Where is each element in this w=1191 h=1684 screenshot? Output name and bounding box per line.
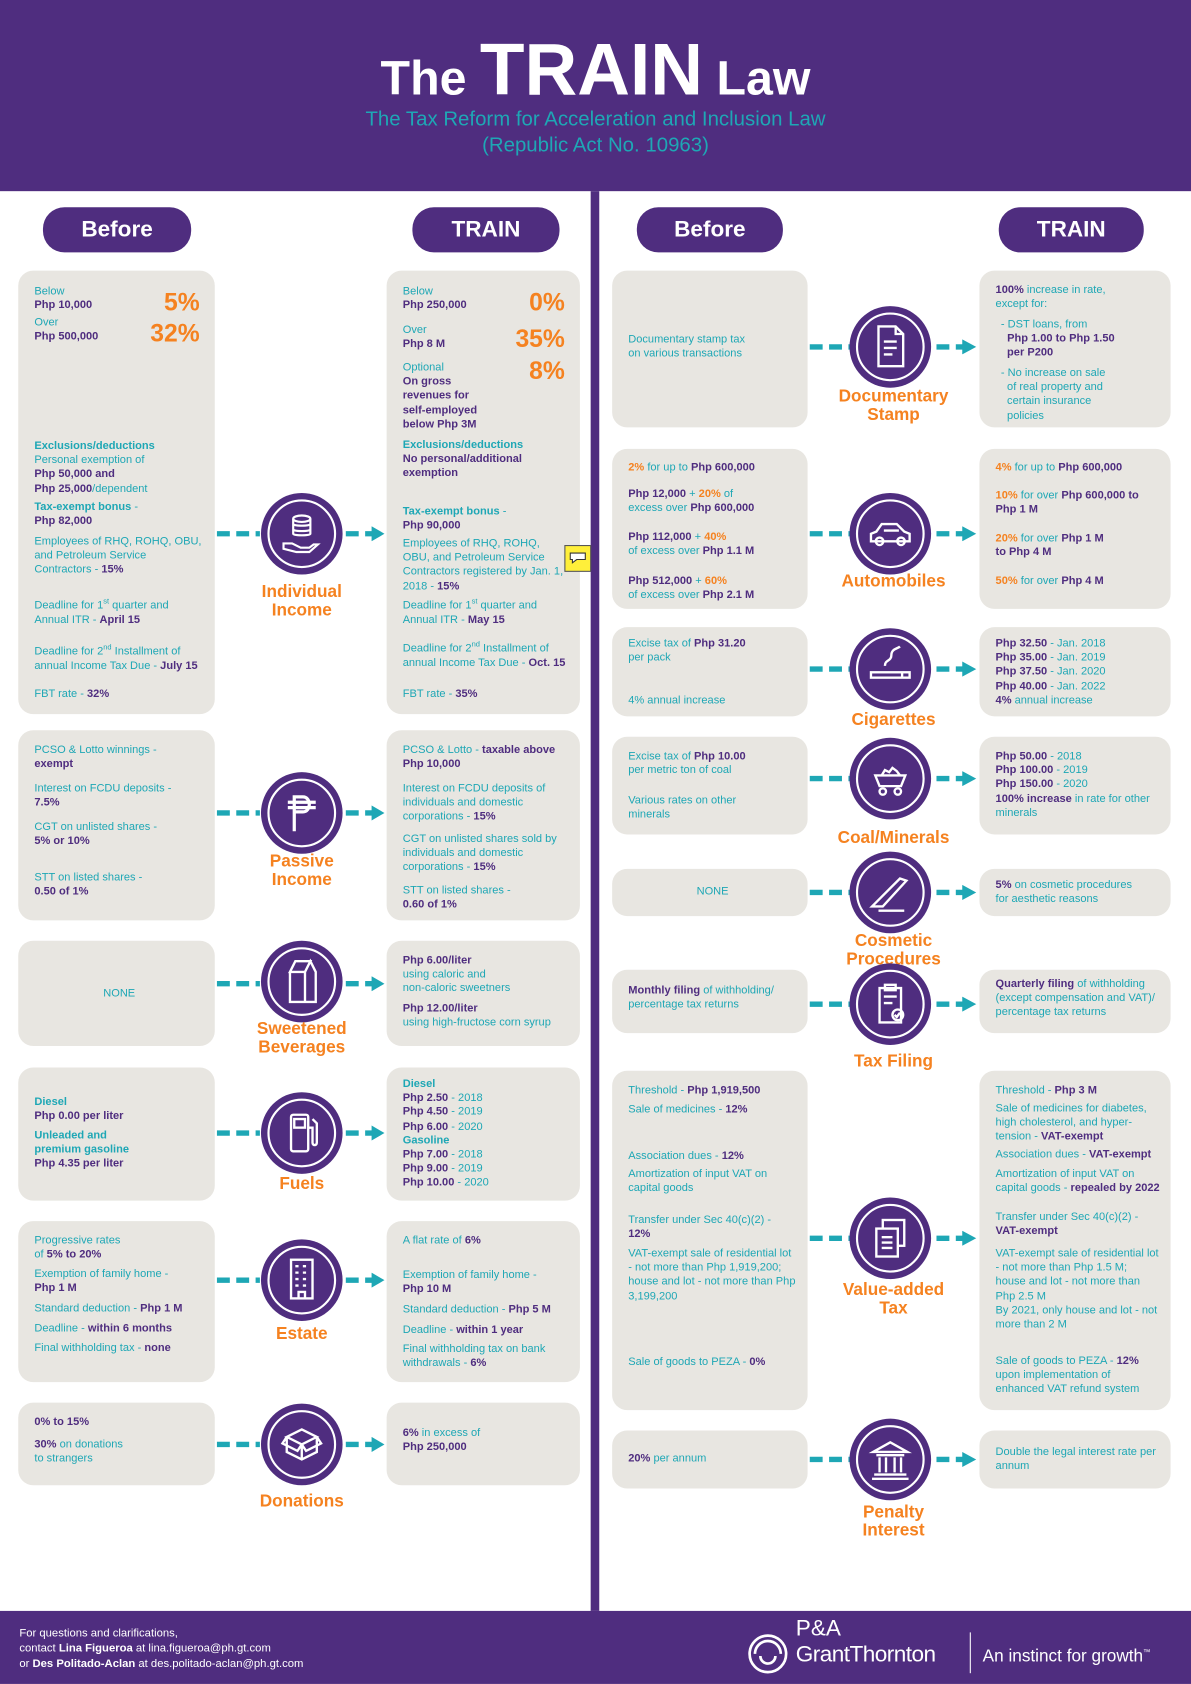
label: value-added tax [843, 1281, 944, 1318]
icon: coal cart [850, 738, 932, 820]
panel: passive before: exempt [34, 758, 73, 770]
subtitle: (Republic Act No. 10963) [482, 134, 709, 157]
panel: individual income before: Php 10,000 [34, 300, 92, 312]
panel: cigarettes train: Php 32.50 - Jan. 2018 [996, 638, 1106, 650]
panel: individual income before: 32% [150, 319, 200, 347]
panel: individual income before: Personal exemption of [34, 454, 144, 466]
arrow: estate [216, 1272, 384, 1288]
icon: courthouse [850, 1418, 932, 1500]
label: coal/minerals: Coal/Minerals [838, 829, 949, 847]
panel: passive train: CGT on unlisted shares sold by individuals and domestic corporations - 15% [403, 833, 557, 874]
panel: passive train: STT on listed shares - [403, 885, 511, 897]
panel: documentary before [612, 271, 808, 427]
panel: coal before: Various rates on other [628, 795, 736, 807]
panel: individual income before: Php 25,000/dependent [34, 483, 148, 495]
panel: individual income train: Deadline for 2nd Installment of annual Income Tax Due - Oct. 15 [403, 641, 565, 669]
icon: gift box [261, 1404, 343, 1486]
label: sweetened beverages [257, 1020, 347, 1057]
pill: before right [637, 207, 783, 252]
panel: fuels train [387, 1067, 580, 1201]
panel: cosmetic train: 5% on cosmetic procedures [996, 880, 1132, 891]
panel: coal train: 100% increase in rate for other minerals [996, 793, 1150, 819]
panel: documentary train [979, 271, 1171, 427]
panel: documentary train: per P200 [1007, 347, 1053, 359]
panel: sweetened before: NONE [103, 988, 135, 1000]
panel: individual income train: FBT rate - 35% [403, 688, 478, 700]
panel: fuels train: Php 4.50 - 2019 [403, 1107, 483, 1118]
panel: estate train: A flat rate of 6% [403, 1235, 481, 1247]
panel: vat train: Transfer under Sec 40(c)(2) - [996, 1211, 1138, 1223]
panel: fuels train: Php 2.50 - 2018 [403, 1092, 483, 1104]
panel: individual income before [18, 271, 215, 714]
arrow: cosmetic [810, 885, 976, 900]
panel: individual income train: Deadline for 1st quarter and Annual ITR - May 15 [403, 598, 537, 626]
panel: individual income before: FBT rate - 32% [34, 688, 109, 700]
panel: individual income train: 0% [529, 288, 565, 316]
pill: before left [43, 207, 191, 252]
panel: individual income before: Php 82,000 [34, 516, 92, 528]
icon: document [850, 306, 932, 388]
panel: penalty train [979, 1430, 1171, 1488]
panel: passive before: PCSO & Lotto winnings - [34, 744, 157, 756]
label: cosmetic procedures: Cosmetic [855, 932, 932, 950]
panel: automobiles train [979, 449, 1171, 609]
icon: individual income [260, 493, 343, 574]
arrow: sweetened [216, 976, 384, 992]
panel: vat train: VAT-exempt [996, 1226, 1058, 1237]
panel: automobiles train: 10% for over Php 600,000 to Php 1 M [996, 490, 1139, 516]
icon: comment note [564, 545, 592, 572]
panel: vat before: VAT-exempt sale of residential lot - not more than Php 1,919,200; house and lot - not more than Php 3,199,200 [628, 1248, 795, 1302]
icon: scalpel [850, 852, 932, 934]
icon: cigarette [850, 628, 932, 710]
panel: coal before: per metric ton of coal [628, 765, 732, 777]
panel: individual income train: Below [403, 286, 433, 297]
icon: car [850, 493, 932, 574]
footer contact text: or Des Politado-Aclan at des.politado-aclan@ph.gt.com [19, 1657, 303, 1670]
panel: cigarettes before: per pack [628, 652, 671, 664]
panel: fuels before: premium gasoline [34, 1144, 129, 1156]
panel: vat train: Sale of medicines for diabetes, high cholesterol, and hyper-tension - VAT-exempt [996, 1103, 1147, 1143]
label: fuels: Fuels [279, 1175, 324, 1193]
panel: documentary train: Php 1.00 to Php 1.50 [1007, 333, 1115, 345]
arrow: tax filing [810, 996, 976, 1012]
panel: fuels before: Diesel [34, 1096, 67, 1108]
label: cigarettes: Cigarettes [852, 711, 936, 729]
panel: cosmetic before [612, 869, 808, 916]
icon: fuel pump [261, 1092, 343, 1174]
panel: tax filing train: Quarterly filing of withholding (except compensation and VAT)/ percentage tax returns [996, 978, 1155, 1019]
icon: peso [261, 772, 343, 854]
label: value-added tax: Value-added [843, 1281, 944, 1299]
panel: coal train: Php 150.00 - 2020 [996, 779, 1088, 791]
panel: fuels before: Unleaded and [34, 1130, 107, 1142]
panel: estate before [18, 1221, 215, 1382]
panel: cigarettes train: Php 37.50 - Jan. 2020 [996, 666, 1106, 678]
icon: carton [260, 940, 343, 1022]
label: individual income [262, 583, 342, 620]
panel: tax filing before [612, 970, 808, 1033]
arrow: passive [216, 806, 384, 820]
panel: individual income train: On gross [403, 376, 451, 388]
panel: sweetened train: using high-fructose corn syrup [403, 1017, 551, 1029]
panel: donations before: to strangers [34, 1453, 93, 1465]
panel: tax filing before: Monthly filing of withholding/ percentage tax returns [628, 985, 774, 1011]
icon: clipboard [850, 963, 932, 1045]
panel: individual income train: No personal/additional exemption [403, 453, 522, 479]
panel: estate before: Php 1 M [34, 1283, 77, 1294]
panel: penalty before: 20% per annum [628, 1453, 706, 1465]
panel: documentary train: policies [1007, 410, 1044, 422]
panel: cosmetic train [979, 869, 1171, 916]
pill: before left: Before [81, 217, 153, 242]
label: documentary stamp: Documentary [839, 388, 948, 406]
panel: passive train: 0.60 of 1% [403, 899, 457, 911]
arrow: documentary [810, 340, 976, 354]
arrow: individual [216, 526, 384, 542]
panel: passive train: PCSO & Lotto - taxable above Php 10,000 [403, 744, 555, 770]
panel: sweetened train [387, 941, 580, 1046]
panel: fuels train: Php 9.00 - 2019 [403, 1163, 483, 1175]
label: sweetened beverages: Sweetened [257, 1020, 347, 1038]
label: donations: Donations [260, 1493, 344, 1511]
panel: donations train: Php 250,000 [403, 1441, 467, 1453]
panel: donations train [387, 1403, 580, 1485]
panel: vat train: VAT-exempt sale of residential lot - not more than Php 1.5 M; [996, 1248, 1159, 1274]
label: documentary stamp: Stamp [867, 406, 920, 424]
label: individual income: Individual [262, 583, 342, 601]
arrow: automobiles [810, 526, 976, 542]
panel: donations train: 6% in excess of [403, 1427, 480, 1439]
panel: documentary train: except for: [996, 299, 1047, 311]
panel: automobiles train: to Php 4 M [996, 547, 1051, 559]
subtitle: The Tax Reform for Acceleration and Inclusion Law [365, 108, 826, 131]
panel: passive before: 7.5% [34, 797, 60, 809]
panel: vat before: Threshold - Php 1,919,500 [628, 1085, 760, 1096]
panel: individual income before: Php 50,000 and [34, 469, 115, 480]
panel: cigarettes train: Php 35.00 - Jan. 2019 [996, 652, 1106, 664]
logo: P&A [796, 1616, 841, 1641]
panel: estate train: Exemption of family home - [403, 1269, 537, 1281]
panel: donations before [18, 1403, 215, 1485]
subtitle [365, 108, 826, 157]
panel: cigarettes before: Excise tax of Php 31.20 [628, 638, 746, 650]
title: The TRAIN Law [381, 29, 810, 111]
panel: cigarettes train: 4% annual increase [996, 695, 1093, 706]
label: passive income [270, 853, 334, 889]
panel: individual income train: Optional [403, 362, 444, 374]
panel: fuels before: Php 4.35 per liter [34, 1158, 123, 1170]
panel: donations before: 0% to 15% [34, 1417, 89, 1428]
label: sweetened beverages: Beverages [258, 1038, 345, 1057]
panel: sweetened train: Php 6.00/liter [403, 955, 472, 967]
panel: sweetened train: non-caloric sweetners [403, 983, 510, 995]
pill: train right: TRAIN [1037, 217, 1106, 242]
panel: coal train [979, 737, 1171, 834]
label: automobiles: Automobiles [841, 572, 946, 591]
footer contact text: For questions and clarifications, [19, 1627, 178, 1640]
arrow: vat [810, 1230, 976, 1246]
panel: vat train: Threshold - Php 3 M [996, 1085, 1097, 1096]
footer contact text [19, 1627, 303, 1670]
panel: passive train [387, 730, 580, 920]
panel: individual income train: Php 250,000 [403, 300, 467, 312]
panel: individual income train: Over [403, 324, 427, 336]
panel: vat train: By 2021, only house and lot - not more than 2 M [996, 1305, 1157, 1331]
arrow: penalty [810, 1452, 976, 1467]
panel: documentary train: - DST loans, from [1001, 319, 1087, 331]
panel: sweetened train: using caloric and [403, 969, 486, 981]
panel: documentary train: - No increase on sale [1001, 367, 1105, 379]
panel: individual income train: below Php 3M [403, 419, 476, 430]
panel: cigarettes before [612, 627, 808, 716]
panel: tax filing train [979, 970, 1171, 1033]
panel: cigarettes before: 4% annual increase [628, 695, 725, 707]
pill: train left: TRAIN [451, 217, 520, 242]
panel: cosmetic before: NONE [697, 886, 729, 898]
panel: individual income train: Php 90,000 [403, 520, 461, 532]
panel: individual income before: Employees of RHQ, ROHQ, OBU, and Petroleum Service Contractors - 15% [34, 536, 202, 576]
logo [748, 1616, 1151, 1674]
panel: fuels train: Gasoline [403, 1135, 449, 1147]
arrow: cigarettes [810, 662, 976, 676]
panel: vat train [979, 1071, 1171, 1410]
label: penalty interest: Penalty [863, 1504, 924, 1522]
panel: vat before: Amortization of input VAT on capital goods [628, 1168, 767, 1194]
header [0, 0, 1191, 191]
pill: before right: Before [674, 217, 746, 242]
panel: automobiles train: 20% for over Php 1 M [996, 533, 1104, 544]
panel: coal before: Excise tax of Php 10.00 [628, 751, 746, 762]
panel: fuels train: Php 10.00 - 2020 [403, 1177, 489, 1189]
panel: passive before: 5% or 10% [34, 836, 90, 848]
label: penalty interest [862, 1504, 925, 1540]
panel: estate before: of 5% to 20% [34, 1249, 101, 1261]
panel: automobiles before [612, 449, 808, 609]
panel: coal train: Php 50.00 - 2018 [996, 751, 1082, 762]
panel: individual income before: Over [34, 317, 58, 329]
panel: cigarettes train [979, 627, 1171, 716]
label: individual income: Income [272, 601, 332, 620]
logo: GrantThornton [796, 1642, 935, 1667]
panel: fuels before [18, 1067, 215, 1201]
panel: vat train: Association dues - VAT-exempt [996, 1149, 1151, 1161]
arrow: coal [810, 771, 976, 786]
panel: individual income before: Deadline for 1st quarter and Annual ITR - April 15 [34, 598, 169, 626]
panel: automobiles train: 4% for up to Php 600,000 [996, 462, 1122, 474]
panel: estate before: Progressive rates [34, 1235, 120, 1247]
panel: individual income train [387, 271, 580, 714]
panel: vat before: Transfer under Sec 40(c)(2) - [628, 1215, 771, 1226]
panel: fuels train: Php 6.00 - 2020 [403, 1121, 483, 1133]
panel: estate before: Exemption of family home - [34, 1268, 168, 1280]
panel: documentary train: 100% increase in rate, [996, 285, 1106, 296]
panel: individual income train: self-employed [403, 404, 477, 416]
panel: individual income before: 5% [164, 288, 200, 316]
panel: documentary before: Documentary stamp tax [628, 334, 745, 346]
panel: automobiles before: excess over Php 600,000 [628, 503, 754, 515]
panel: vat before: 12% [628, 1229, 650, 1241]
panel: documentary before: on various transactions [628, 348, 742, 360]
panel: estate train: Deadline - within 1 year [403, 1324, 523, 1336]
panel: donations before: 30% on donations [34, 1439, 123, 1451]
panel: sweetened train: Php 12.00/liter [403, 1003, 478, 1015]
label: cosmetic procedures: Procedures [846, 950, 941, 969]
panel: coal before: minerals [628, 809, 670, 821]
logo: An instinct for growth™ [983, 1647, 1151, 1666]
arrow: donations [216, 1437, 384, 1452]
panel: documentary train: certain insurance [1007, 396, 1091, 407]
panel: automobiles train: 50% for over Php 4 M [996, 576, 1104, 587]
panel: individual income train: Exclusions/deductions [403, 439, 523, 451]
panel: passive train: Interest on FCDU deposits of individuals and domestic corporations - 15% [403, 783, 545, 823]
panel: individual income before: Php 500,000 [34, 331, 98, 343]
panel: vat train: house and lot - not more than Php 2.5 M [996, 1276, 1140, 1302]
icon: building [260, 1239, 343, 1321]
panel: vat before: Sale of goods to PEZA - 0% [628, 1356, 765, 1368]
panel: individual income train: 35% [515, 324, 565, 352]
panel: passive before: STT on listed shares - [34, 872, 142, 884]
panel: vat before [612, 1071, 808, 1410]
panel: individual income train: Tax-exempt bonus - [403, 506, 506, 518]
arrow: fuels [216, 1126, 384, 1140]
panel: automobiles before: Php 12,000 + 20% of [628, 489, 733, 500]
panel: passive before: 0.50 of 1% [34, 886, 88, 898]
panel: vat before: Association dues - 12% [628, 1150, 744, 1162]
panel: fuels train: Php 7.00 - 2018 [403, 1149, 483, 1161]
panel: penalty before [612, 1430, 808, 1488]
footer contact text: contact Lina Figueroa at lina.figueroa@ph.gt.com [19, 1642, 271, 1655]
panel: individual income before: Tax-exempt bonus - [34, 502, 138, 513]
icon: stacked documents [850, 1198, 932, 1280]
panel: individual income before: Deadline for 2nd Installment of annual Income Tax Due - July 15 [34, 644, 198, 672]
panel: penalty train: Double the legal interest rate per annum [996, 1447, 1156, 1473]
label: estate: Estate [276, 1325, 328, 1343]
panel: fuels before: Php 0.00 per liter [34, 1111, 123, 1122]
label: value-added tax: Tax [879, 1299, 908, 1318]
panel: individual income train: Php 8 M [403, 339, 445, 350]
panel: estate train [387, 1221, 580, 1382]
pill: train left [412, 207, 560, 252]
panel: automobiles before: Php 112,000 + 40% [628, 532, 726, 543]
label: tax filing: Tax Filing [854, 1052, 933, 1071]
panel: estate before: Final withholding tax - none [34, 1342, 171, 1354]
panel: coal before [612, 737, 808, 834]
panel: vat before: Sale of medicines - 12% [628, 1104, 748, 1116]
panel: individual income train: 8% [529, 357, 565, 384]
panel: automobiles before: of excess over Php 1.1 M [628, 546, 754, 558]
panel: passive before: CGT on unlisted shares - [34, 822, 157, 833]
label: passive income: Income [272, 871, 332, 889]
panel: automobiles before: 2% for up to Php 600,000 [628, 462, 755, 474]
panel: coal train: Php 100.00 - 2019 [996, 765, 1088, 777]
panel: automobiles before: of excess over Php 2.1 M [628, 590, 754, 602]
label: passive income: Passive [270, 853, 334, 871]
pill: train right [999, 207, 1144, 252]
panel: documentary train: of real property and [1007, 381, 1103, 393]
label: documentary stamp [839, 388, 948, 424]
panel: estate train: Final withholding tax on bank withdrawals - 6% [403, 1343, 545, 1369]
panel: individual income before: Exclusions/deductions [34, 440, 155, 452]
panel: vat train: Amortization of input VAT on capital goods - repealed by 2022 [996, 1168, 1160, 1194]
panel: passive before: Interest on FCDU deposits - [34, 783, 171, 795]
panel: sweetened before [18, 941, 215, 1046]
panel: estate before: Deadline - within 6 months [34, 1323, 172, 1335]
label: penalty interest: Interest [862, 1522, 925, 1540]
panel: individual income before: Below [34, 286, 64, 297]
panel: cosmetic train: for aesthetic reasons [996, 894, 1098, 906]
panel: fuels train: Diesel [403, 1078, 435, 1090]
panel: estate train: Php 10 M [403, 1284, 451, 1295]
panel: estate before: Standard deduction - Php 1 M [34, 1303, 183, 1315]
panel: individual income train: revenues for [403, 390, 469, 402]
label: cosmetic procedures [846, 932, 941, 969]
panel: individual income train: Employees of RHQ, ROHQ, OBU, and Petroleum Service Contractors registered by Jan. 1, 2018 - 15% [403, 538, 563, 592]
panel: cigarettes train: Php 40.00 - Jan. 2022 [996, 680, 1106, 692]
panel: estate train: Standard deduction - Php 5 M [403, 1304, 551, 1316]
panel: vat train: Sale of goods to PEZA - 12% upon implementation of enhanced VAT refund system [996, 1355, 1139, 1395]
footer [0, 1611, 1191, 1684]
panel: automobiles before: Php 512,000 + 60% [628, 576, 727, 587]
panel: passive before [18, 730, 215, 920]
